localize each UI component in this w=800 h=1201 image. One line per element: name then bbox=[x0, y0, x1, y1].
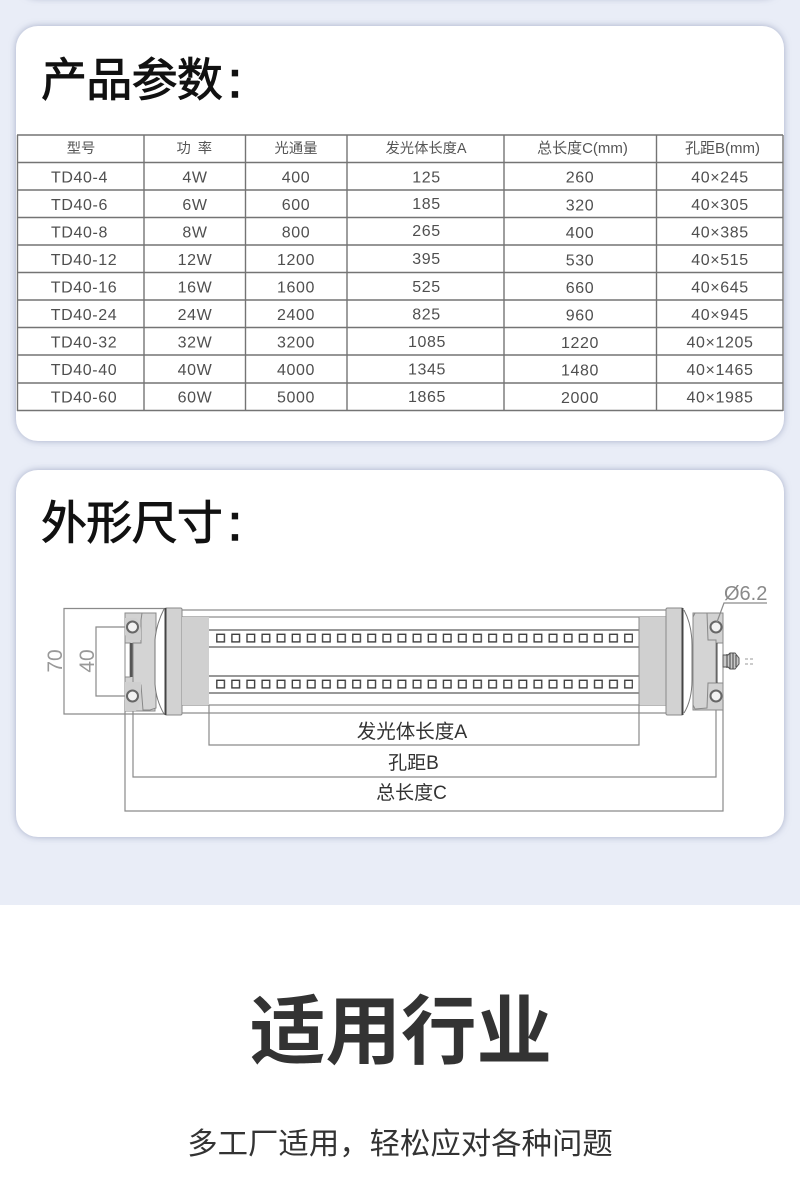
row TD40-12: 395 bbox=[412, 251, 441, 268]
row TD40-4: 4W bbox=[182, 169, 208, 186]
row TD40-40: 1480 bbox=[561, 362, 599, 379]
label: total length C: 总长度C bbox=[376, 782, 447, 804]
row TD40-40: 1345 bbox=[408, 361, 446, 378]
label: 70: 70 bbox=[44, 649, 67, 673]
row TD40-16: 16W bbox=[178, 279, 213, 296]
right end cap bbox=[639, 608, 723, 745]
row TD40-12: 530 bbox=[566, 252, 594, 269]
row TD40-8: 40×385 bbox=[691, 224, 749, 241]
row TD40-8: 265 bbox=[412, 223, 441, 240]
subtitle: 多工厂适用，轻松应对各种问题 bbox=[187, 1127, 613, 1161]
row TD40-4 bbox=[51, 169, 749, 186]
row TD40-60 bbox=[51, 389, 753, 407]
label: hole spacing B: 孔距B bbox=[388, 752, 439, 774]
row TD40-8: TD40-8 bbox=[51, 224, 108, 241]
row TD40-16: 525 bbox=[412, 279, 441, 296]
row TD40-40: 40W bbox=[178, 362, 213, 379]
table grid bbox=[17, 135, 783, 411]
row TD40-12 bbox=[51, 251, 749, 269]
table header row bbox=[67, 140, 760, 157]
row TD40-4: 40×245 bbox=[691, 169, 749, 186]
row TD40-40: 40×1465 bbox=[687, 362, 753, 379]
row TD40-16 bbox=[51, 279, 749, 297]
row TD40-60: 5000 bbox=[277, 389, 315, 406]
row TD40-16: 660 bbox=[566, 280, 594, 297]
row TD40-12: TD40-12 bbox=[51, 252, 117, 269]
label: emitting length A: 发光体长度A bbox=[357, 721, 467, 743]
row TD40-16: 1600 bbox=[277, 279, 315, 296]
row TD40-40 bbox=[51, 361, 753, 379]
table header row: 孔距B(mm) bbox=[685, 140, 760, 157]
row TD40-32: 40×1205 bbox=[687, 334, 753, 351]
row TD40-6: 40×305 bbox=[691, 197, 749, 214]
panel: product parameters bbox=[16, 26, 784, 441]
section: suitable industries bbox=[0, 905, 800, 1201]
row TD40-32: 3200 bbox=[277, 334, 315, 351]
row TD40-6: TD40-6 bbox=[51, 197, 108, 214]
row TD40-60: TD40-60 bbox=[51, 389, 117, 406]
panel: outline dimensions bbox=[16, 470, 784, 837]
row TD40-4: TD40-4 bbox=[51, 169, 108, 186]
heading: outline dimensions: 外形尺寸 bbox=[41, 497, 222, 549]
row TD40-8: 8W bbox=[182, 224, 208, 241]
label: hole diameter: Ø6.2 bbox=[724, 583, 767, 605]
row TD40-6: 320 bbox=[566, 197, 594, 214]
label: 40: 40 bbox=[76, 649, 99, 673]
lamp body rails bbox=[182, 610, 666, 713]
row TD40-12: 12W bbox=[178, 252, 213, 269]
row TD40-24: 960 bbox=[566, 307, 594, 324]
row TD40-6: 600 bbox=[282, 197, 310, 214]
row TD40-6 bbox=[51, 196, 749, 214]
row TD40-40: TD40-40 bbox=[51, 362, 117, 379]
row TD40-24 bbox=[51, 306, 749, 324]
row TD40-8 bbox=[51, 223, 749, 242]
row TD40-24: 40×945 bbox=[691, 307, 749, 324]
row TD40-32: 1085 bbox=[408, 334, 446, 351]
heading: product parameters: 产品参数 bbox=[41, 54, 222, 106]
row TD40-60: 1865 bbox=[408, 389, 446, 406]
row TD40-6: 185 bbox=[412, 196, 441, 213]
row TD40-12: 40×515 bbox=[691, 252, 749, 269]
row TD40-32: 1220 bbox=[561, 335, 599, 352]
text: : bbox=[228, 495, 241, 551]
row TD40-60: 60W bbox=[178, 389, 213, 406]
connector bbox=[723, 653, 754, 669]
parameter table bbox=[17, 135, 783, 411]
row TD40-6: 6W bbox=[182, 197, 208, 214]
row TD40-24: TD40-24 bbox=[51, 307, 117, 324]
row TD40-32 bbox=[51, 334, 753, 352]
LED strip upper bbox=[216, 634, 633, 643]
table header row: 型号 bbox=[67, 140, 95, 157]
row TD40-24: 825 bbox=[412, 306, 441, 323]
row TD40-4: 400 bbox=[282, 169, 310, 186]
row TD40-32: 32W bbox=[178, 334, 213, 351]
dimension drawing bbox=[44, 583, 767, 811]
row TD40-24: 2400 bbox=[277, 307, 315, 324]
dimension lines bbox=[64, 608, 723, 811]
row TD40-24: 24W bbox=[178, 307, 213, 324]
row TD40-16: TD40-16 bbox=[51, 279, 117, 296]
table header row: 总长度C(mm) bbox=[537, 140, 628, 157]
row TD40-60: 40×1985 bbox=[687, 389, 753, 406]
text: : bbox=[228, 52, 241, 108]
row TD40-60: 2000 bbox=[561, 390, 599, 407]
row TD40-4: 125 bbox=[412, 169, 441, 186]
row TD40-40: 4000 bbox=[277, 362, 315, 379]
LED strip lower bbox=[216, 680, 633, 689]
row TD40-16: 40×645 bbox=[691, 279, 749, 296]
row TD40-4: 260 bbox=[566, 169, 594, 186]
table header row: 功 率 bbox=[176, 140, 214, 157]
label: hole diameter bbox=[717, 583, 767, 622]
table header row: 发光体长度A bbox=[385, 140, 467, 157]
row TD40-8: 800 bbox=[282, 224, 310, 241]
row TD40-12: 1200 bbox=[277, 252, 315, 269]
table header row: 光通量 bbox=[275, 140, 317, 157]
heading: suitable industries: 适用行业 bbox=[250, 990, 552, 1074]
row TD40-8: 400 bbox=[566, 225, 594, 242]
row TD40-32: TD40-32 bbox=[51, 334, 117, 351]
left end cap bbox=[125, 608, 209, 715]
